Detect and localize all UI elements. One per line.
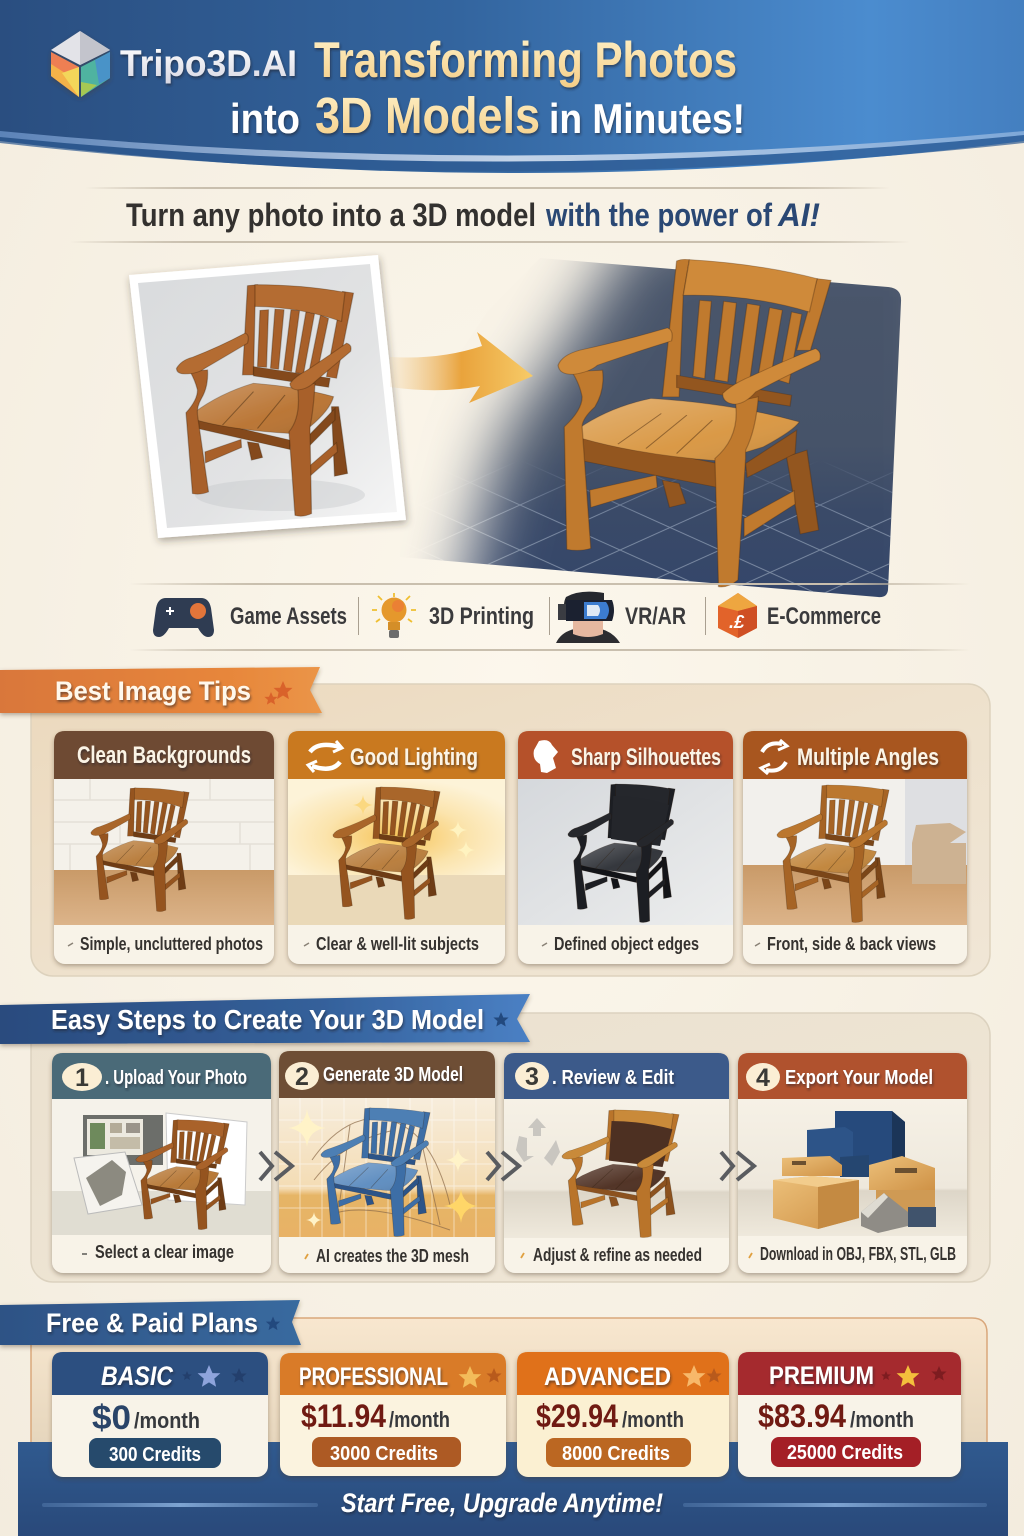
plan card: basic <box>52 1352 268 1477</box>
plan card: premium: 25000 Credits <box>787 1442 903 1464</box>
card: step 4 export <box>738 1053 967 1273</box>
card: step 3 review: Adjust & refine as needed <box>533 1245 702 1265</box>
panel: plans <box>0 1300 1008 1536</box>
panel: easy steps <box>0 994 990 1282</box>
plan card: professional: $11.94 <box>301 1398 386 1434</box>
step number 2 <box>285 1062 319 1090</box>
card: step 1 upload: Select a clear image <box>95 1242 234 1262</box>
footer tagline: Start Free, Upgrade Anytime! <box>341 1488 663 1518</box>
footer band <box>18 1442 1008 1536</box>
subtitle: with the power of <box>545 197 772 233</box>
card: step 3 review <box>504 1053 729 1273</box>
card: step 1 upload: 1 <box>75 1064 89 1092</box>
card: step 4 export: Export Your Model <box>785 1067 933 1089</box>
label: Game Assets: Game Assets <box>230 603 347 630</box>
plan card: professional: /month <box>389 1407 450 1432</box>
plan card: premium: $83.94 <box>758 1398 846 1434</box>
plan card: basic: /month <box>134 1408 200 1433</box>
plan card: premium: /month <box>850 1407 914 1432</box>
card: sharp silhouettes: Sharp Silhouettes <box>571 744 721 771</box>
card: step 1 upload <box>52 1053 271 1273</box>
card: step 4 export: 4 <box>756 1064 770 1092</box>
card: step 3 review: 3 <box>525 1063 539 1091</box>
3D model render backdrop <box>400 258 901 597</box>
card: clean backgrounds: Clean Backgrounds <box>77 742 251 769</box>
icon: e-commerce box: .£ <box>729 612 745 632</box>
subtitle <box>70 187 910 243</box>
plan card: basic: $0 <box>92 1399 131 1437</box>
card: sharp silhouettes <box>518 731 733 964</box>
icon: VR headset <box>556 592 620 643</box>
footer tagline <box>42 1488 987 1518</box>
card: clean backgrounds <box>54 731 274 964</box>
step number 3 <box>515 1062 549 1090</box>
card: multiple angles <box>743 731 967 964</box>
panel: best image tips <box>0 667 990 976</box>
icon: sync arrows <box>308 741 342 772</box>
heading ribbon: Easy Steps <box>0 994 530 1044</box>
plan card: professional: PROFESSIONAL <box>299 1363 448 1391</box>
heading ribbon: Easy Steps: Easy Steps to Create Your 3D Model <box>51 1004 484 1035</box>
card: step 2 generate: 2 <box>295 1063 309 1091</box>
rotate arrows icon <box>516 1118 560 1166</box>
step number 4 <box>746 1063 780 1091</box>
card: multiple angles: Front, side & back views <box>767 934 936 954</box>
card: step 1 upload: . Upload Your Photo <box>105 1067 247 1089</box>
card: step 3 review: . Review & Edit <box>552 1067 674 1089</box>
photo print with chair <box>129 255 406 538</box>
card: step 2 generate <box>279 1051 495 1273</box>
icon: rotate arrows <box>761 740 787 774</box>
label: 3D Printing: 3D Printing <box>429 603 534 630</box>
plan card: advanced: $29.94 <box>536 1398 618 1434</box>
cardboard box <box>912 823 966 884</box>
step number 1 <box>62 1063 102 1091</box>
plan card: basic: 300 Credits <box>109 1444 201 1466</box>
heading ribbon: Free & Paid Plans: Free & Paid Plans <box>46 1308 258 1338</box>
icon: silhouette <box>534 740 558 773</box>
plan card: advanced <box>517 1352 729 1477</box>
icon: light bulb <box>372 593 416 638</box>
credits pill <box>89 1438 221 1468</box>
brand name: Tripo3D.AI <box>120 43 297 84</box>
use case strip <box>130 583 970 651</box>
label: E-Commerce: E-Commerce <box>767 603 881 630</box>
plan card: advanced: 8000 Credits <box>562 1443 670 1465</box>
title line 1: Transforming Photos <box>314 32 737 88</box>
title line 2: 3D Models <box>315 87 540 144</box>
plan card: premium <box>738 1352 961 1477</box>
header banner <box>0 0 1024 173</box>
credits pill <box>546 1438 691 1467</box>
3D chair model <box>558 259 831 587</box>
label: VR/AR: VR/AR <box>625 603 686 630</box>
arrow: photo to model <box>390 332 533 403</box>
card: good lighting: Good Lighting <box>350 744 478 771</box>
card: good lighting <box>288 731 505 964</box>
plan card: advanced: ADVANCED <box>544 1363 671 1391</box>
card: sharp silhouettes: Defined object edges <box>554 934 699 954</box>
plan card: advanced: /month <box>622 1407 684 1432</box>
plan card: professional <box>280 1353 506 1476</box>
plan card: professional: 3000 Credits <box>330 1443 438 1465</box>
subtitle: Turn any photo into a 3D model <box>126 197 536 233</box>
export boxes illustration <box>773 1111 936 1233</box>
credits pill <box>771 1437 921 1467</box>
card: multiple angles: Multiple Angles <box>797 744 939 771</box>
credits pill <box>312 1437 461 1467</box>
title line 2: in Minutes! <box>549 95 745 142</box>
heading ribbon: Best Image Tips <box>0 667 322 713</box>
logo: Tripo3D cube <box>51 31 110 97</box>
card: clean backgrounds: Simple, uncluttered photos <box>80 934 263 954</box>
icon: game controller <box>153 598 214 637</box>
card: step 2 generate: Generate 3D Model <box>323 1064 463 1086</box>
card: good lighting: Clear & well-lit subjects <box>316 934 479 954</box>
plan card: basic: BASIC <box>101 1361 173 1391</box>
heading ribbon: Free & Paid Plans <box>0 1300 301 1345</box>
title line 2: into <box>230 95 300 142</box>
plan card: premium: PREMIUM <box>769 1362 874 1390</box>
photo collage <box>74 1113 247 1214</box>
card: step 2 generate: AI creates the 3D mesh <box>316 1246 469 1266</box>
heading ribbon: Best Image Tips: Best Image Tips <box>55 676 251 706</box>
icon: e-commerce box <box>718 593 757 638</box>
title line 2 <box>230 87 745 144</box>
chevron arrows between steps <box>260 1152 754 1180</box>
subtitle: AI! <box>777 197 820 233</box>
